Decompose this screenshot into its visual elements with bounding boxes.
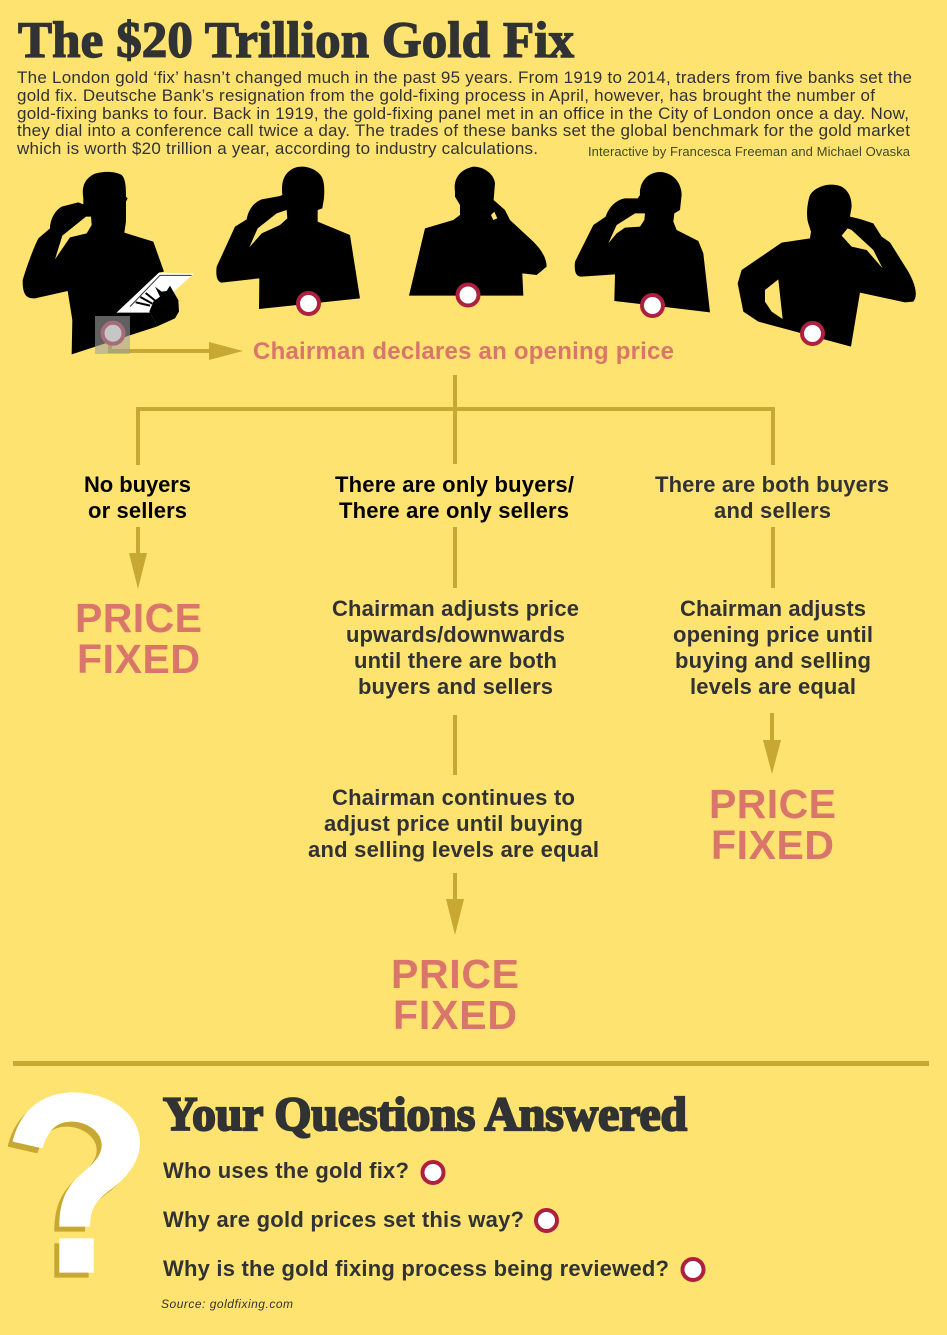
- result: price fixed, branch 3: [709, 781, 836, 868]
- branch 2 step 1 text: Chairman adjusts price: [332, 596, 579, 621]
- intro text block: [16, 68, 912, 158]
- section divider: [13, 1061, 929, 1066]
- icon: question mark: [8, 1092, 140, 1278]
- branch 2 step 2 text: and selling levels are equal: [308, 837, 599, 862]
- result: price fixed, branch 1: [75, 595, 202, 682]
- branch 2 label: There are only buyers/: [335, 472, 574, 497]
- branch 3 step text: [673, 596, 873, 699]
- icon: chairman silhouette with tablet: [23, 172, 194, 354]
- question 2: Why are gold prices set this way?: [163, 1207, 524, 1232]
- branch 2 step 2 text: [308, 785, 599, 862]
- branch 3 label: and sellers: [714, 498, 831, 523]
- icon: banker silhouette 4: [575, 172, 710, 312]
- credit line: Interactive by Francesca Freeman and Michael Ovaska: [588, 144, 911, 159]
- branch 3 step text: levels are equal: [690, 674, 856, 699]
- branch 2 label: [335, 472, 574, 523]
- arrow: chairman to opening price: [110, 342, 243, 360]
- branch 2 step 1 text: buyers and sellers: [358, 674, 553, 699]
- result: price fixed, branch 1: FIXED: [77, 636, 200, 682]
- intro text block: which is worth $20 trillion a year, according to industry calculations.: [16, 139, 538, 158]
- branch 3 step text: Chairman adjusts: [680, 596, 866, 621]
- marker: banker 4: [642, 295, 663, 316]
- heading: your questions answered: Your Questions Answered: [163, 1088, 687, 1141]
- connector: branch 2 second step: [453, 715, 457, 775]
- title: The $20 Trillion Gold Fix: [18, 13, 574, 69]
- icon: banker silhouette 2: [216, 167, 360, 309]
- arrow: branch 2 down: [446, 873, 464, 935]
- branch 2 step 1 text: [332, 596, 579, 699]
- marker: chairman, highlighted: [95, 316, 130, 354]
- branch 2 label: There are only sellers: [339, 498, 569, 523]
- intro text block: gold-fixing banks to four. Back in 1919, the gold-fixing panel met in an office in the City of London once a day. Now,: [17, 104, 909, 123]
- arrow: branch 3 down: [763, 713, 781, 774]
- marker: banker 3: [458, 284, 478, 306]
- question 3: Why is the gold fixing process being reviewed?: [163, 1256, 669, 1281]
- result: price fixed, branch 2: FIXED: [393, 992, 517, 1038]
- branch 2 step 1 text: upwards/downwards: [346, 622, 565, 647]
- branch 3 step text: buying and selling: [675, 648, 871, 673]
- connector: branch 2 first step: [453, 527, 457, 588]
- icon: banker silhouette 5: [738, 185, 916, 347]
- intro text block: gold fix. Deutsche Bank’s resignation from the gold-fixing process in April, however, has brought the number of: [17, 86, 875, 105]
- branch 1 label: No buyers: [84, 472, 191, 497]
- icon: banker silhouette 3: [409, 167, 547, 296]
- branch 1 label: [84, 472, 191, 523]
- flow connector: three branches: [138, 375, 773, 465]
- result: price fixed, branch 3: FIXED: [711, 822, 834, 868]
- opening price heading: Chairman declares an opening price: [253, 338, 674, 365]
- marker: banker 5: [802, 323, 823, 344]
- branch 3 label: [655, 472, 889, 523]
- intro text block: they dial into a conference call twice a day. The trades of these banks set the global benchmark for the gold market: [17, 121, 910, 140]
- branch 2 step 2 text: adjust price until buying: [324, 811, 583, 836]
- result: price fixed, branch 3: PRICE: [709, 781, 836, 827]
- intro text block: The London gold ‘fix’ hasn’t changed much in the past 95 years. From 1919 to 2014, traders from five banks set the: [17, 68, 912, 87]
- branch 2 step 2 text: Chairman continues to: [332, 785, 575, 810]
- branch 1 label: or sellers: [88, 498, 187, 523]
- result: price fixed, branch 1: PRICE: [75, 595, 202, 641]
- question 1: Who uses the gold fix?: [163, 1158, 409, 1183]
- source: Source: goldfixing.com: [161, 1297, 293, 1311]
- connector: branch 3 first step: [771, 527, 775, 588]
- branch 3 step text: opening price until: [673, 622, 873, 647]
- result: price fixed, branch 2: [391, 951, 519, 1038]
- branch 3 label: There are both buyers: [655, 472, 889, 497]
- arrow: branch 1 down: [129, 527, 147, 589]
- result: price fixed, branch 2: PRICE: [391, 951, 519, 997]
- branch 2 step 1 text: until there are both: [354, 648, 557, 673]
- marker: banker 2: [298, 293, 319, 314]
